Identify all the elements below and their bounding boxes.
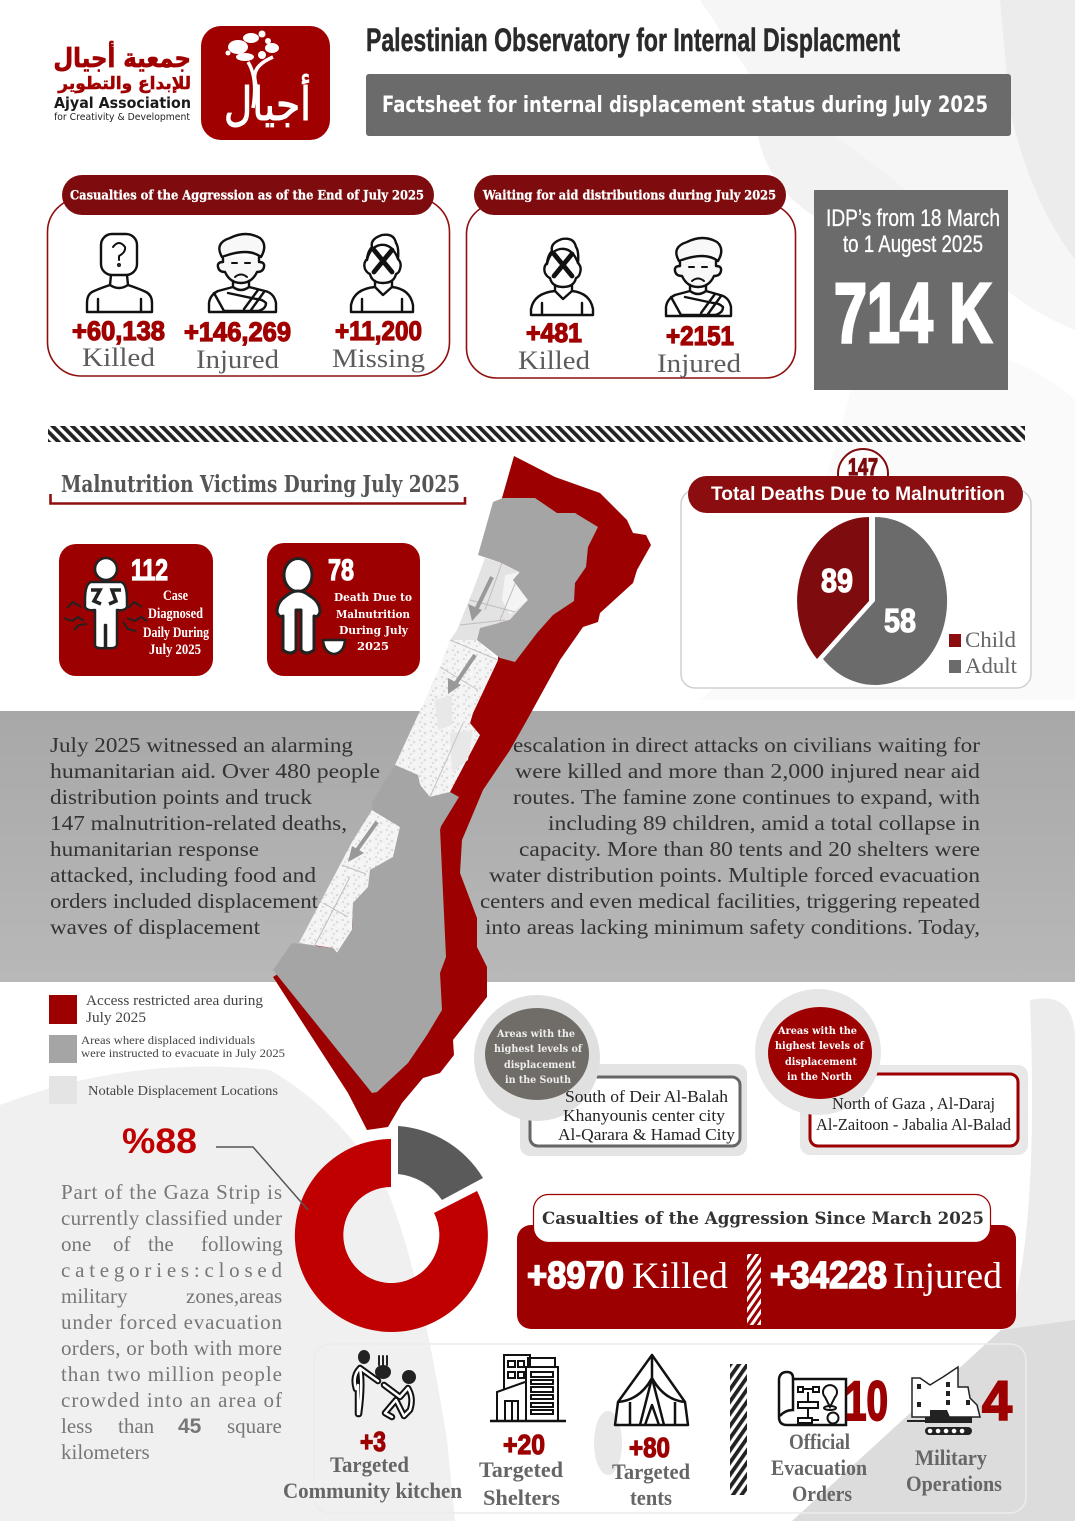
map legend: Access restricted area during: [86, 993, 263, 1009]
panel: total deaths due to malnutrition: [681, 449, 1031, 688]
icon: person in hunger pain: [64, 558, 147, 648]
card: 112 cases diagnosed: July 2025: [149, 642, 201, 658]
panel: targeted facilities and operations: 10: [845, 1369, 888, 1432]
card: 78 malnutrition deaths: [267, 543, 420, 676]
hatched divider: [48, 426, 1025, 442]
grey narrative band: humanitarian aid. Over 480 people: [50, 759, 380, 783]
panel: casualties of the aggression: Casualties of the Aggression as of the End of July 2025: [70, 188, 424, 204]
callout: south displacement: South of Deir Al-Balah: [565, 1087, 729, 1106]
panel: waiting for aid distributions: Waiting for aid distributions during July 2025: [482, 188, 776, 204]
callout: 88 percent: [122, 1122, 308, 1210]
pie chart: [797, 517, 947, 685]
map: displacement locations north: [450, 558, 528, 640]
icon: community kitchen: [355, 1350, 416, 1417]
map: displacement locations centre: [395, 640, 498, 797]
text block: classified areas: kilometers: [61, 1440, 150, 1464]
panel: casualties since March 2025: [517, 1194, 1016, 1329]
icon: injured person with sling: [209, 234, 276, 312]
logo: Ajyal Association: للإبداع والتطوير: [57, 74, 191, 94]
panel: casualties since March 2025: Casualties of the Aggression Since March 2025: [542, 1209, 984, 1229]
grey narrative band: escalation in direct attacks on civilians waiting for: [513, 733, 980, 757]
panel: IDPs total: [814, 190, 1008, 390]
grey narrative band: including 89 children, amid a total collapse in: [548, 811, 981, 835]
icon: unknown person: [87, 234, 152, 312]
callout: south displacement: highest levels of: [494, 1043, 583, 1055]
heading: malnutrition victims: [50, 471, 465, 504]
panel: waiting for aid distributions: [466, 175, 796, 378]
card: 112 cases diagnosed: [59, 544, 213, 676]
text block: classified areas: than: [118, 1414, 155, 1438]
grey narrative band: waves of displacement: [50, 915, 260, 939]
panel: casualties of the aggression: +146,269: [184, 317, 291, 347]
text block: classified areas: following: [201, 1232, 283, 1256]
panel: targeted facilities and operations: +20: [503, 1429, 545, 1460]
text block: classified areas: zones,areas: [186, 1284, 282, 1308]
panel: targeted facilities and operations: Targeted: [330, 1452, 409, 1477]
map legend: [49, 993, 285, 1104]
map: evacuation area north: [477, 498, 598, 662]
donut chart 88%: [122, 1122, 488, 1332]
map legend: July 2025: [86, 1010, 146, 1026]
logo: Ajyal Association: [53, 26, 330, 140]
text block: classified areas: Part of the Gaza Strip is: [61, 1180, 282, 1204]
panel: casualties of the aggression: Missing: [332, 344, 425, 373]
callout: north displacement: Al-Zaitoon - Jabalia Al-Balad: [816, 1115, 1012, 1134]
callout: north displacement: North of Gaza , Al-Daraj: [832, 1094, 995, 1113]
grey narrative band: centers and even medical facilities, triggering repeated: [480, 889, 981, 913]
card: 78 malnutrition deaths: 2025: [357, 639, 389, 653]
grey narrative band: into areas lacking minimum safety conditions. Today,: [485, 915, 980, 939]
text block: classified areas: of: [113, 1232, 130, 1256]
panel: targeted facilities and operations: [283, 1344, 1026, 1513]
logo: Ajyal Association: for Creativity & Development: [54, 112, 190, 123]
panel: targeted facilities and operations: Targeted: [479, 1457, 563, 1482]
icon: shelter building: [490, 1355, 566, 1421]
panel: total deaths due to malnutrition: Total Deaths Due to Malnutrition: [711, 484, 1005, 505]
card: 112 cases diagnosed: 112: [131, 554, 168, 587]
text block: classified areas: 45: [178, 1415, 202, 1438]
text block: classified areas: military: [61, 1284, 128, 1308]
grey narrative band: humanitarian response: [50, 837, 259, 861]
callout: north displacement: in the North: [787, 1071, 852, 1083]
panel: casualties of the aggression: [48, 175, 450, 376]
panel: waiting for aid distributions: +2151: [666, 321, 734, 351]
icon: seated person with bowl: [277, 558, 345, 654]
panel: targeted facilities and operations: Orders: [792, 1481, 852, 1506]
panel: targeted facilities and operations: Community kitchen: [283, 1478, 462, 1503]
text block: classified areas: orders, or both with more: [61, 1336, 282, 1360]
text block: classified areas: crowded into an area of: [61, 1388, 282, 1412]
map legend: Notable Displacement Locations: [88, 1083, 278, 1098]
text block: classified areas: square: [227, 1414, 282, 1438]
card: 78 malnutrition deaths: Death Due to: [334, 590, 412, 604]
map legend: Areas where displaced individuals: [81, 1033, 255, 1047]
grey narrative band: [0, 711, 1075, 982]
text block: classified areas: than two million people: [61, 1362, 282, 1386]
panel: targeted facilities and operations: tents: [630, 1485, 672, 1510]
grey narrative band: orders included displacement: [50, 889, 318, 913]
icon: injured person: [666, 238, 731, 316]
callout: north displacement: displacement: [785, 1056, 857, 1068]
panel: targeted facilities and operations: +80: [629, 1432, 670, 1463]
grey narrative band: routes. The famine zone continues to expand, with: [513, 785, 981, 809]
subtitle banner: [366, 74, 1011, 136]
heading: malnutrition victims: Malnutrition Victims During July 2025: [61, 471, 460, 498]
text block: classified areas: one: [61, 1232, 91, 1256]
callout: south displacement: in the South: [505, 1074, 571, 1086]
panel: casualties since March 2025: +34228: [770, 1255, 887, 1297]
grey narrative band: distribution points and truck: [50, 785, 313, 809]
card: 78 malnutrition deaths: 78: [328, 554, 354, 587]
arrow: north displacement: [468, 577, 492, 621]
text block: classified areas: less: [61, 1414, 92, 1438]
pie chart: 89: [821, 562, 853, 599]
badge: 147: [838, 449, 888, 499]
text block: classified areas: categories:closed: [61, 1258, 282, 1282]
panel: casualties since March 2025: +8970: [527, 1255, 624, 1297]
panel: casualties of the aggression: Injured: [196, 345, 279, 374]
callout: south displacement: Khanyounis center city: [563, 1106, 726, 1125]
grey narrative band: attacked, including food and: [50, 863, 317, 887]
card: 78 malnutrition deaths: Malnutrition: [336, 607, 411, 621]
card: 112 cases diagnosed: Diagnosed: [148, 606, 203, 622]
pie legend: Child: [965, 627, 1016, 652]
panel: casualties since March 2025: Injured: [893, 1256, 1002, 1297]
callout: south displacement: Areas with the: [496, 1028, 575, 1040]
panel: targeted facilities and operations: 4: [982, 1369, 1012, 1432]
callout: 88 percent: %88: [122, 1122, 197, 1161]
icon: missing person with crossed face: [351, 235, 413, 312]
callout: south displacement: displacement: [504, 1059, 576, 1071]
icon: evacuation map: [779, 1372, 846, 1425]
arrow: south displacement: [348, 822, 377, 862]
map: access restricted area: [273, 456, 651, 1130]
panel: waiting for aid distributions: Injured: [657, 349, 741, 378]
callout: north displacement: highest levels of: [775, 1040, 865, 1052]
panel: casualties since March 2025: Killed: [632, 1256, 729, 1297]
map: evacuation area south: [273, 765, 459, 1093]
pie legend: Adult: [965, 653, 1017, 678]
panel: targeted facilities and operations: Operations: [906, 1471, 1002, 1496]
text block: classified areas: [61, 1180, 283, 1464]
pie chart: 58: [884, 602, 916, 639]
badge: 147: 147: [848, 454, 878, 481]
panel: IDPs total: IDP’s from 18 March: [826, 205, 1000, 232]
map legend: were instructed to evacuate in July 2025: [81, 1046, 285, 1060]
panel: targeted facilities and operations: Targeted: [612, 1459, 690, 1484]
panel: casualties of the aggression: Killed: [82, 343, 155, 372]
panel: IDPs total: to 1 Augest 2025: [843, 231, 983, 258]
hatched separator: [730, 1364, 747, 1495]
icon: tank and ruins: [907, 1367, 980, 1435]
panel: waiting for aid distributions: +481: [526, 318, 582, 348]
text block: classified areas: under forced evacuation: [61, 1310, 282, 1334]
grey narrative band: water distribution points. Multiple forced evacuation: [489, 863, 981, 887]
callout: north displacement: Areas with the: [777, 1025, 857, 1037]
callout: south displacement: [474, 995, 747, 1156]
panel: casualties of the aggression: +60,138: [72, 316, 165, 346]
text block: classified areas: the: [148, 1232, 174, 1256]
panel: targeted facilities and operations: Shelters: [483, 1485, 560, 1510]
map of the Gaza Strip: [273, 456, 651, 1130]
callout: north displacement: [755, 989, 1028, 1155]
icon: tent: [615, 1355, 688, 1425]
grey narrative band: 147 malnutrition-related deaths,: [50, 811, 347, 835]
grey narrative band: were killed and more than 2,000 injured near aid: [515, 759, 981, 783]
grey narrative band: capacity. More than 80 tents and 20 shelters were: [519, 837, 980, 861]
panel: targeted facilities and operations: +3: [360, 1426, 386, 1457]
arrow: central displacement: [448, 655, 475, 694]
pie legend: [949, 627, 1017, 678]
map: displacement locations south: [299, 810, 400, 953]
panel: targeted facilities and operations: Evacuation: [771, 1455, 867, 1480]
logo: Ajyal Association: Ajyal Association: [54, 94, 191, 112]
panel: waiting for aid distributions: Killed: [518, 346, 590, 375]
logo: Ajyal Association: جمعية أجيال: [53, 40, 191, 73]
card: 112 cases diagnosed: Case: [163, 588, 188, 604]
logo: Ajyal Association: أجيال: [224, 74, 311, 132]
panel: targeted facilities and operations: Military: [915, 1445, 987, 1470]
callout: south displacement: Al-Qarara & Hamad City: [558, 1125, 736, 1144]
panel: casualties of the aggression: +11,200: [335, 316, 422, 346]
panel: targeted facilities and operations: Official: [789, 1429, 850, 1454]
icon: killed person: [531, 239, 593, 315]
panel: IDPs total: 714 K: [834, 266, 992, 360]
grey narrative band: July 2025 witnessed an alarming: [50, 733, 354, 757]
text block: classified areas: currently classified under: [61, 1206, 282, 1230]
card: 112 cases diagnosed: Daily During: [143, 625, 210, 641]
card: 78 malnutrition deaths: During July: [339, 623, 408, 637]
